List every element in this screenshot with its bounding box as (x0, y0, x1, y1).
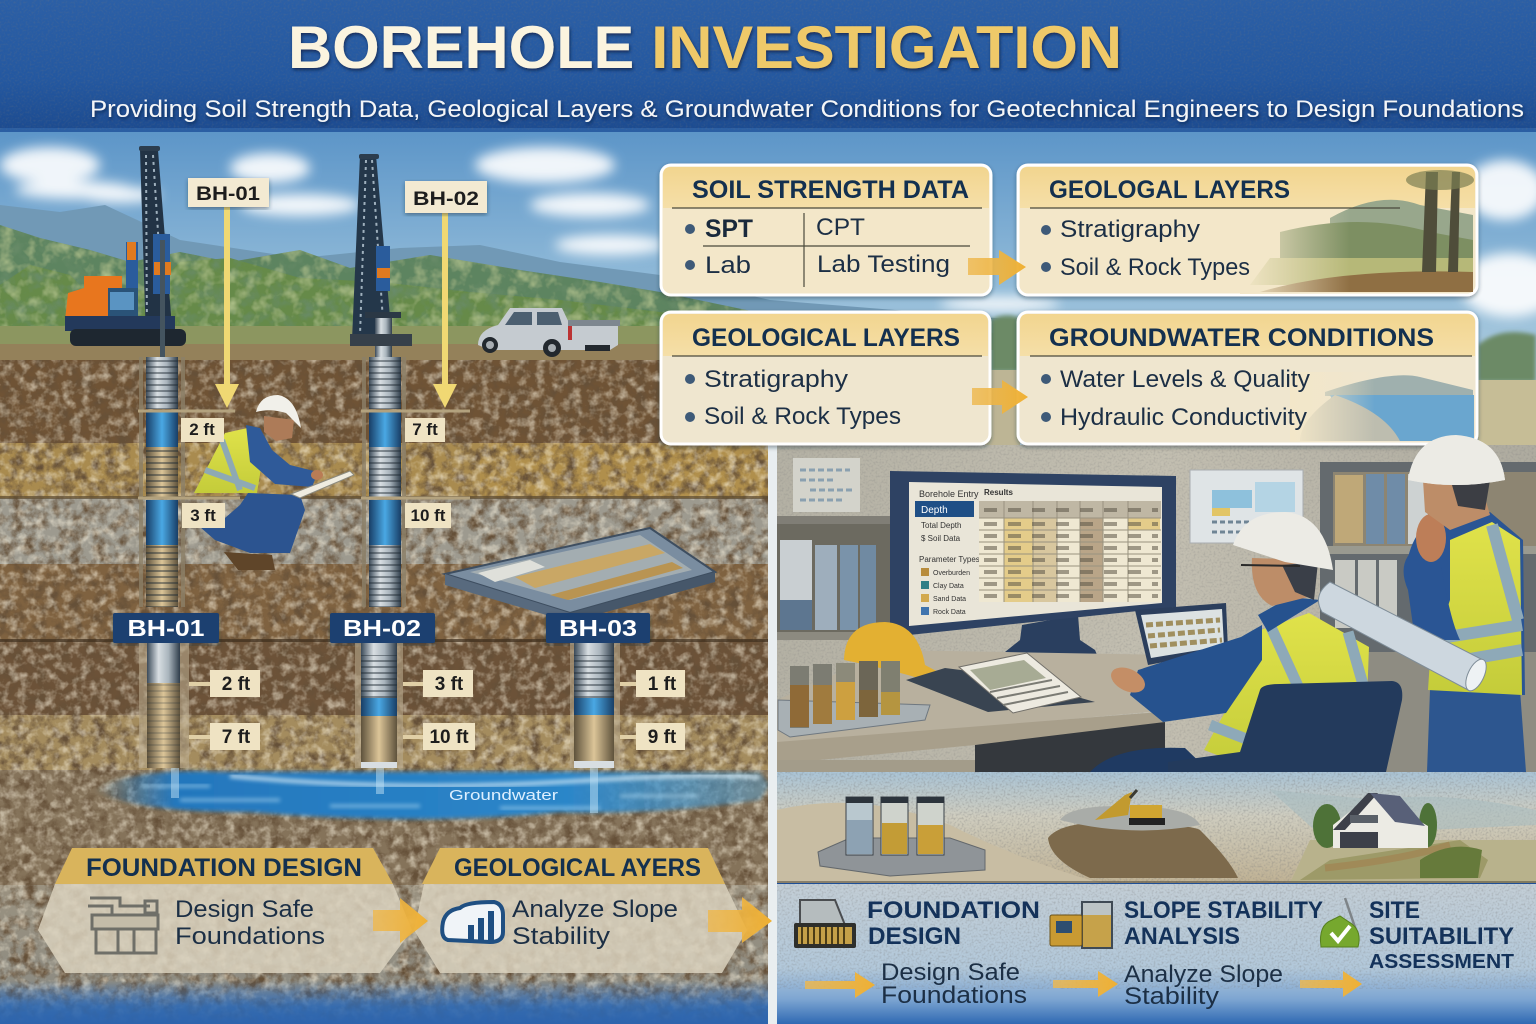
card: geologal layers with landscape (1018, 165, 1477, 295)
sidebar: Depth (921, 505, 948, 516)
right column backdrop: office wall (777, 445, 1536, 772)
office chair (1168, 681, 1402, 772)
sidebar: Parameter Types (919, 555, 980, 564)
farm house (1300, 793, 1488, 880)
label plates BH-01 BH-02 BH-03 (113, 613, 650, 643)
depth tags lower (189, 670, 685, 750)
depth tags upper: 7 ft (412, 420, 438, 439)
card: geologal layers with landscape: Stratigraphy (1060, 216, 1200, 243)
right binder shelves (1320, 462, 1536, 772)
arrow: strength to layers (968, 250, 1026, 285)
icon: foundation box (794, 900, 856, 948)
label plates BH-01 BH-02 BH-03: BH-01 (128, 615, 205, 641)
left binder shelf (777, 516, 895, 640)
arrow: to site suitability (1300, 971, 1362, 997)
wall chart poster (1190, 470, 1303, 543)
card: geological layers: GEOLOGICAL LAYERS (692, 324, 960, 352)
subtitle: Providing Soil Strength Data, Geological Layers & Groundwater Conditions for Geotechnical Engineers to Design Foundations (90, 96, 1524, 123)
callout: BH-02 marker with arrow (405, 181, 487, 408)
card: groundwater conditions: GROUNDWATER CONDITIONS (1049, 324, 1434, 352)
hard hat crown overlapping groundwater card (1408, 435, 1505, 485)
laptop (1135, 603, 1228, 698)
step: foundation design (794, 897, 1040, 950)
card: soil strength data: CPT (816, 214, 865, 241)
sidebar: Clay Data (933, 583, 964, 590)
panel: foundation design hexagon: Foundations (175, 923, 325, 950)
step: site suitability assessment: SUITABILITY (1369, 923, 1514, 950)
title: BOREHOLE INVESTIGATION (288, 14, 1122, 81)
icon: foundation (88, 898, 158, 953)
card: soil strength data: SPT (705, 215, 753, 243)
card: groundwater conditions: Water Levels & Quality (1060, 366, 1310, 393)
borehole column BH-01 lower (139, 643, 189, 798)
borehole column BH-01 upper (138, 357, 240, 607)
sidebar: Rock Data (933, 609, 966, 616)
depth tags upper: 3 ft (190, 506, 216, 525)
panel: foundation design hexagon: FOUNDATION DESIGN (86, 854, 362, 882)
step: foundation design: FOUNDATION (867, 897, 1040, 924)
callout: BH-02 marker with arrow: BH-02 (413, 189, 479, 210)
step: foundation design: DESIGN (868, 923, 961, 950)
depth tags lower: 2 ft (222, 674, 251, 695)
groundwater pool (95, 771, 770, 819)
text: analyze slope stability with arrow: Stability (1124, 983, 1219, 1010)
card: geological layers (661, 312, 990, 444)
bottom right illustration strip (777, 772, 1536, 883)
sidebar: Borehole Entry (919, 489, 979, 499)
card: groundwater conditions (1018, 312, 1477, 444)
depth tags upper (181, 418, 451, 528)
bottom right info band (777, 884, 1536, 1024)
text: design safe foundations with arrow: Foundations (881, 982, 1027, 1009)
sidebar (915, 489, 980, 616)
text: design safe foundations with arrow (805, 959, 1027, 1009)
borehole column BH-02 upper (361, 357, 470, 607)
text: analyze slope stability with arrow: Analyze Slope (1124, 961, 1283, 988)
sample jars on plinth (818, 797, 985, 876)
core sample tray (445, 528, 715, 622)
step: site suitability assessment (1320, 897, 1514, 973)
drill rig 2 (350, 154, 412, 360)
results table (979, 488, 1161, 602)
step: site suitability assessment: SITE (1369, 897, 1420, 924)
label plates BH-01 BH-02 BH-03: BH-02 (343, 615, 421, 641)
card: soil strength data: SOIL STRENGTH DATA (692, 176, 969, 204)
panel: foundation design hexagon: Design Safe (175, 896, 314, 923)
panel: geological ayers hexagon: GEOLOGICAL AYERS (454, 854, 701, 882)
sidebar: Overburden (933, 570, 970, 577)
step: slope stability analysis: ANALYSIS (1124, 923, 1240, 950)
card: groundwater conditions: Hydraulic Conductivity (1060, 404, 1307, 431)
icon: sample machine (1050, 902, 1112, 948)
results table: Results (984, 488, 1013, 497)
panel: geological ayers hexagon: Analyze Slope (512, 896, 678, 923)
arrow: foundation to geological (373, 898, 428, 943)
callout: BH-01 marker with arrow (188, 178, 269, 408)
card: geologal layers with landscape: Soil & Rock Types (1060, 254, 1250, 281)
card: soil strength data: Lab (705, 252, 751, 279)
standing engineer (1404, 435, 1526, 772)
step: slope stability analysis (1050, 897, 1323, 950)
depth tags lower: 9 ft (648, 727, 677, 748)
depth tags lower: 7 ft (222, 727, 251, 748)
depth tags upper: 10 ft (411, 506, 446, 525)
scenery background: sky and hills (0, 130, 1536, 450)
card: geological layers: Soil & Rock Types (704, 403, 901, 430)
landscape vignette (1240, 170, 1474, 294)
depth tags lower: 1 ft (648, 674, 677, 695)
field worker crouching with clipboard (194, 395, 354, 570)
header band (0, 0, 1536, 132)
step: slope stability analysis: SLOPE STABILITY (1124, 897, 1323, 924)
pickup truck (478, 308, 620, 357)
label plates BH-01 BH-02 BH-03: BH-03 (559, 615, 637, 641)
soil cross-section layers (0, 326, 770, 1024)
excavator on cut mound (1048, 790, 1238, 878)
borehole column BH-02 lower (355, 643, 403, 794)
panel: geological ayers hexagon (414, 848, 747, 973)
sidebar: $ Soil Data (921, 534, 961, 543)
sidebar: Sand Data (933, 596, 966, 603)
icon: cloud chart (442, 902, 503, 942)
arrow: layers to groundwater (972, 380, 1028, 414)
label: groundwater: Groundwater (449, 787, 558, 804)
callout: BH-01 marker with arrow: BH-01 (196, 184, 261, 205)
depth tags lower: 3 ft (435, 674, 464, 695)
sample jars in tray (778, 661, 930, 737)
panel: geological ayers hexagon: Stability (512, 923, 610, 950)
rolled blueprint (1318, 582, 1490, 694)
card: geological layers: Stratigraphy (704, 366, 848, 393)
depth tags lower: 10 ft (429, 727, 469, 748)
icon: check badge and probe (1320, 898, 1359, 947)
yellow hard hat (844, 622, 940, 680)
text: design safe foundations with arrow: Design Safe (881, 959, 1020, 986)
card: soil strength data (661, 165, 991, 295)
depth tags upper: 2 ft (189, 420, 215, 439)
computer monitor with borehole data table (890, 471, 1176, 662)
water vignette (1290, 372, 1474, 442)
pinned note on wall (793, 458, 860, 512)
arrow: exits left column (708, 897, 772, 943)
card: soil strength data: Lab Testing (817, 251, 950, 278)
card: geologal layers with landscape: GEOLOGAL LAYERS (1049, 176, 1290, 204)
step: site suitability assessment: ASSESSMENT (1369, 951, 1514, 973)
seated engineer (1090, 512, 1369, 772)
drill rig 1 with orange machine (65, 146, 186, 360)
text: analyze slope stability with arrow (1053, 961, 1283, 1010)
panel: foundation design hexagon (38, 848, 412, 973)
desk (777, 650, 1170, 772)
divider between columns (768, 445, 777, 1024)
open report on desk (906, 653, 1095, 713)
sidebar: Total Depth (921, 521, 961, 530)
borehole column BH-03 lower (570, 643, 620, 813)
